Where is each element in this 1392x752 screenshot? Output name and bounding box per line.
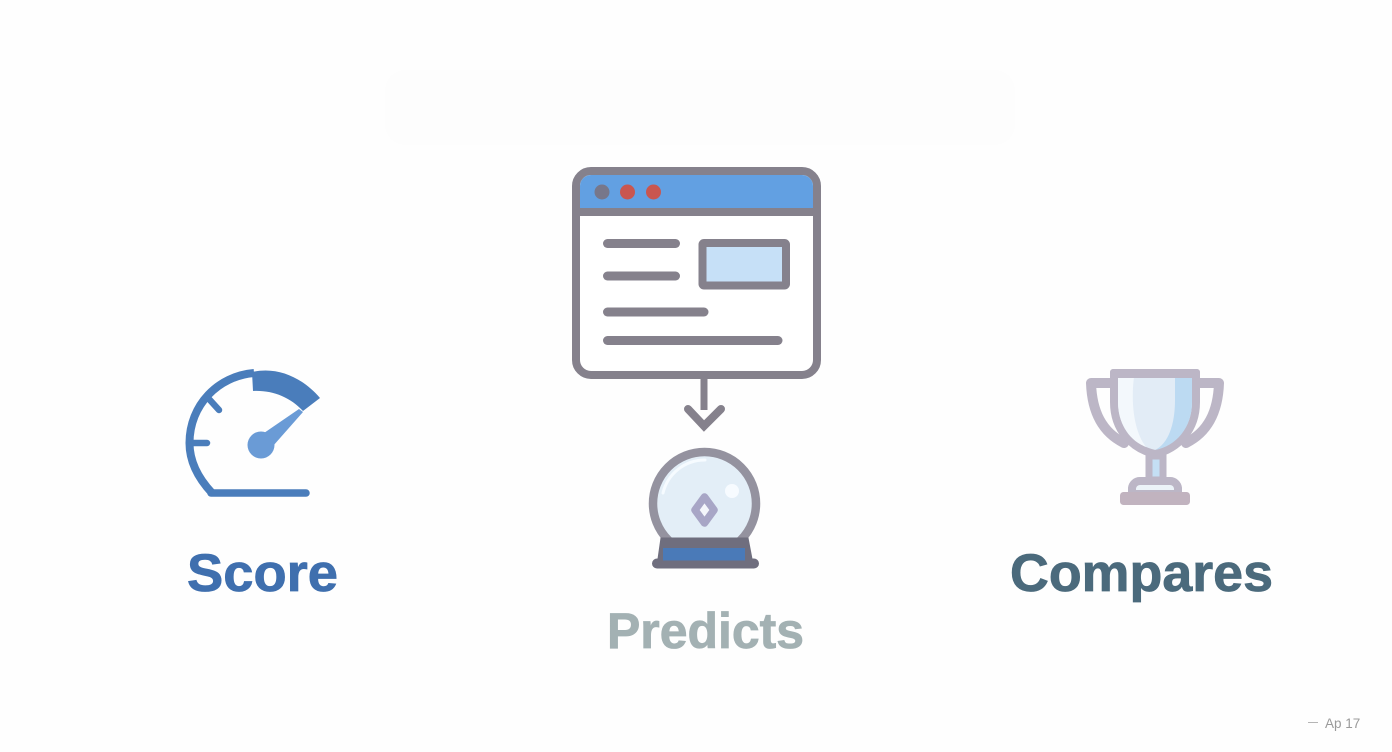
image placeholder [702,243,786,286]
cup shading [1155,377,1192,450]
diamond [695,497,714,523]
window control dots [594,184,661,200]
icon: speed gauge [190,370,320,493]
handles [1091,383,1124,443]
browser title bar [580,175,813,208]
label: Score: Score [187,544,338,603]
icon: browser window [576,171,817,375]
icon: trophy [1091,369,1219,505]
ball base [652,538,758,568]
arrow: browser to crystal ball [688,379,721,426]
faded title area [385,70,1015,145]
text lines [608,244,778,340]
dial ticks [192,399,219,443]
stem [1149,456,1163,480]
label: Compares: Compares [1010,544,1273,603]
footer date note: Ap 17 [1325,716,1360,731]
cup [1114,373,1196,454]
thick dial section [252,370,320,411]
label: Predicts: Predicts [607,603,804,659]
icon: crystal ball [652,452,758,568]
base [1132,481,1178,494]
footer date note [1308,716,1360,731]
needle and hub [248,409,303,458]
